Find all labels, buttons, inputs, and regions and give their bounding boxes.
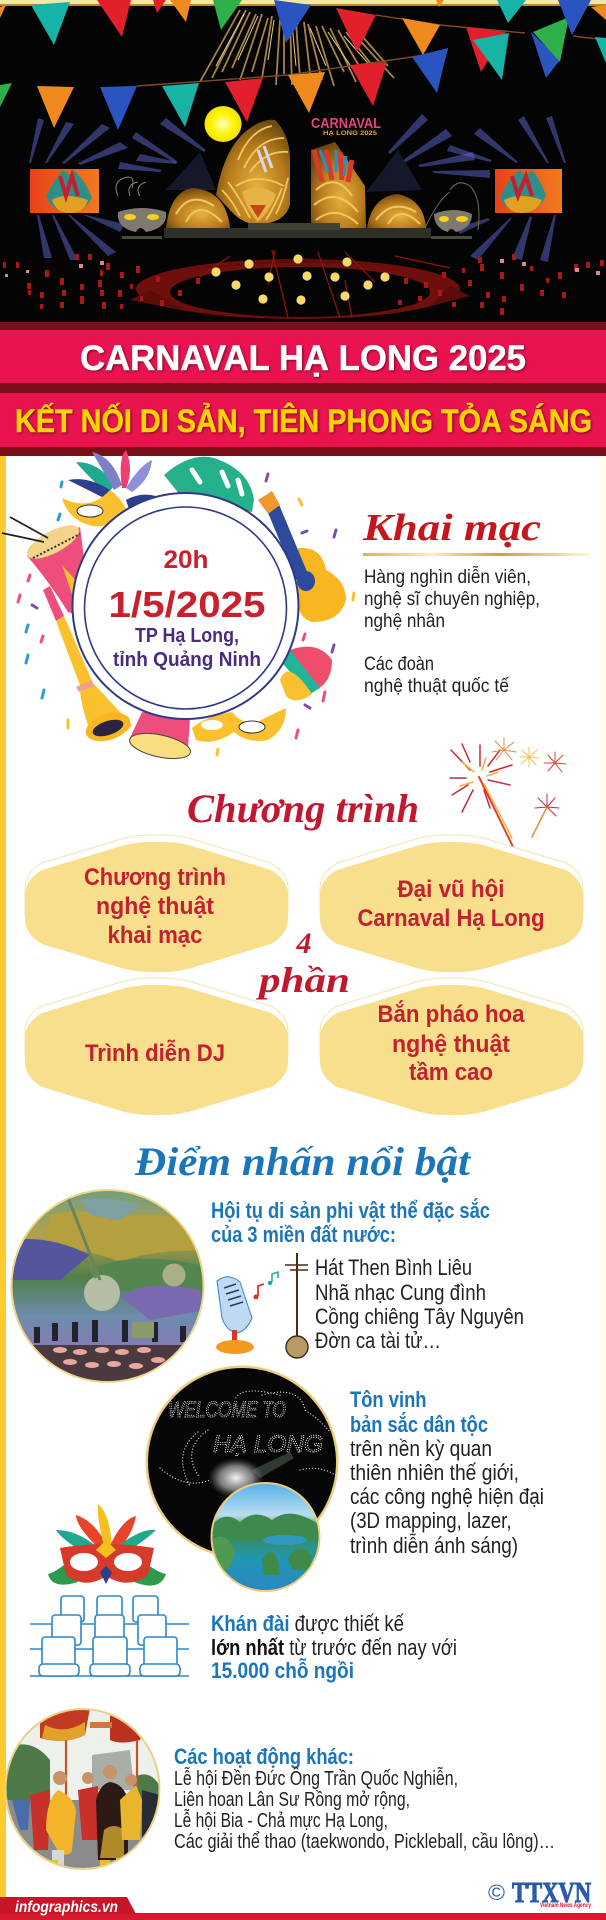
photo: drone show over Hạ Long: WELCOME TO xyxy=(168,1397,286,1422)
time: 20h xyxy=(164,546,208,574)
panel: program item 2 xyxy=(320,835,583,972)
TTXVN logo: © xyxy=(488,1880,505,1905)
light beams xyxy=(29,114,566,262)
dark band under titles xyxy=(0,447,606,456)
opening text: nghệ sĩ chuyên nghiệp, xyxy=(364,589,540,610)
icon: trumpet xyxy=(43,586,64,621)
dark side triangles xyxy=(166,150,422,192)
center label: 4 phần xyxy=(255,927,350,1000)
other activities text: Lễ hội Bia - Chả mực Hạ Long, xyxy=(174,1809,388,1832)
other activities text: Các hoạt động khác: xyxy=(174,1744,354,1769)
dark band under photo xyxy=(0,322,606,330)
cultural text: thiên nhiên thế giới, xyxy=(350,1460,519,1485)
grandstand text: Khán đài được thiết kế xyxy=(211,1611,404,1636)
panel: program item 4: nghệ thuật xyxy=(392,1031,510,1058)
TTXVN logo: Vietnam News Agency xyxy=(540,1903,592,1909)
icon: yellow mask xyxy=(62,490,128,526)
panel: program item 1 xyxy=(25,835,288,972)
icon: feathers xyxy=(76,462,114,495)
cultural text: trên nền kỳ quan xyxy=(350,1436,492,1461)
carnaval stage logo xyxy=(311,115,381,137)
icon: carnival mask xyxy=(48,1504,166,1586)
icon: lower drum xyxy=(130,712,190,748)
heading: Khai mạc: Khai mạc xyxy=(362,507,541,549)
arena ring xyxy=(136,259,460,319)
heritage list xyxy=(315,1255,524,1353)
grandstand text xyxy=(211,1611,457,1683)
icon: flute xyxy=(266,502,308,580)
center label: 4 phần: 4 xyxy=(296,927,312,960)
heading: Chương trình: Chương trình xyxy=(187,786,419,831)
carnaval stage logo: HẠ LONG 2025 xyxy=(323,131,378,137)
panel: program item 3: Trình diễn DJ xyxy=(85,1039,225,1067)
grandstand text: 15.000 chỗ ngồi xyxy=(211,1658,354,1683)
opening text: Các đoàn xyxy=(364,654,434,675)
left yellow edge strip xyxy=(0,456,6,1920)
panel: program item 2: Carnaval Hạ Long xyxy=(358,905,544,932)
icon: guitar xyxy=(298,548,346,622)
heading: Điểm nhấn nổi bật: Điểm nhấn nổi bật xyxy=(134,1139,472,1184)
icon: grandstand seats xyxy=(30,1596,189,1676)
heritage heading xyxy=(211,1198,490,1247)
header stage illustration xyxy=(0,0,606,322)
opening text: nghệ thuật quốc tế xyxy=(364,676,509,697)
province: tỉnh Quảng Ninh xyxy=(113,649,261,671)
cultural text: (3D mapping, lazer, xyxy=(350,1508,512,1533)
center label: 4 phần: phần xyxy=(255,960,350,1000)
place: TP Hạ Long, xyxy=(135,625,239,647)
icon: monstera leaf xyxy=(164,457,254,512)
carnival decoration wreath xyxy=(2,450,354,763)
icon: music notes xyxy=(254,1272,278,1300)
icon: microphone xyxy=(216,1277,254,1354)
heritage list: Cồng chiêng Tây Nguyên xyxy=(315,1304,524,1329)
panel: program item 2: Đại vũ hội xyxy=(398,876,504,903)
panel: program item 4: Bắn pháo hoa xyxy=(378,1000,525,1028)
confetti xyxy=(18,474,354,755)
heritage list: Nhã nhạc Cung đình xyxy=(315,1280,486,1305)
TTXVN logo xyxy=(488,1878,592,1909)
dragon panels xyxy=(216,120,290,224)
photo: Hạ Long bay xyxy=(210,1482,320,1592)
photo: festival parade xyxy=(4,1708,162,1872)
heritage list: Đờn ca tài tử… xyxy=(315,1328,441,1353)
decorative stage masks xyxy=(116,177,479,232)
photo: drone show over Hạ Long xyxy=(146,1365,338,1560)
panel: program item 3 xyxy=(25,978,288,1115)
date: 1/5/2025 xyxy=(108,584,266,625)
heritage heading: Hội tụ di sản phi vật thể đặc sắc xyxy=(211,1198,490,1223)
icon: lower mask xyxy=(192,708,286,742)
subtitle banner xyxy=(0,393,606,447)
gold lanterns xyxy=(211,254,390,305)
panel: program item 4: tầm cao xyxy=(409,1059,493,1086)
bunting strings xyxy=(137,15,606,86)
seats xyxy=(3,254,604,315)
title banner: Carnaval Hạ Long 2025: CARNAVAL HẠ LONG 2025 xyxy=(80,339,526,378)
gold rule xyxy=(363,553,590,556)
cultural text: bản sắc dân tộc xyxy=(350,1412,488,1437)
icon: fireworks xyxy=(450,738,566,853)
cultural text: Tôn vinh xyxy=(350,1387,426,1412)
panel: program item 1: Chương trình xyxy=(84,864,226,891)
footer tab: infographics.vn: infographics.vn xyxy=(15,1899,118,1916)
heritage list: Hát Then Bình Liêu xyxy=(315,1255,472,1280)
icon: left drum xyxy=(27,527,92,620)
cultural text: các công nghệ hiện đại xyxy=(350,1484,544,1509)
right pale edge strip xyxy=(600,456,606,1920)
photo: heritage performance xyxy=(10,1188,205,1387)
panel: program item 4 xyxy=(320,978,583,1115)
icon: maracas xyxy=(290,647,332,690)
other activities text xyxy=(174,1744,555,1853)
title banner: Carnaval Hạ Long 2025 xyxy=(0,330,606,383)
date circle xyxy=(72,493,298,719)
icon: dan instrument xyxy=(285,1253,308,1358)
fireworks over stage xyxy=(200,10,394,90)
cultural text: trình diễn ánh sáng) xyxy=(350,1533,518,1558)
photo: drone show over Hạ Long: HẠ LONG xyxy=(213,1431,323,1458)
opening text: Hàng nghìn diễn viên, xyxy=(364,566,531,588)
cultural text xyxy=(350,1387,544,1558)
panel: program item 1: nghệ thuật xyxy=(96,893,214,920)
heritage heading: của 3 miền đất nước: xyxy=(211,1222,396,1247)
opening text: nghệ nhân xyxy=(364,611,445,632)
screens xyxy=(30,169,99,213)
stage floor xyxy=(164,228,431,238)
dark band between titles xyxy=(0,383,606,393)
panel: program item 1: khai mạc xyxy=(108,922,202,949)
other activities text: Liên hoan Lân Sư Rồng mở rộng, xyxy=(174,1789,410,1811)
other activities text: Lễ hội Đền Đức Ông Trần Quốc Nghiễn, xyxy=(174,1767,458,1790)
opening text xyxy=(364,566,540,697)
carnaval stage logo: CARNAVAL xyxy=(311,115,381,132)
grandstand text: lớn nhất từ trước đến nay với xyxy=(211,1635,457,1660)
moon xyxy=(204,106,242,142)
footer bar xyxy=(0,1913,606,1920)
bunting flags xyxy=(0,0,606,130)
